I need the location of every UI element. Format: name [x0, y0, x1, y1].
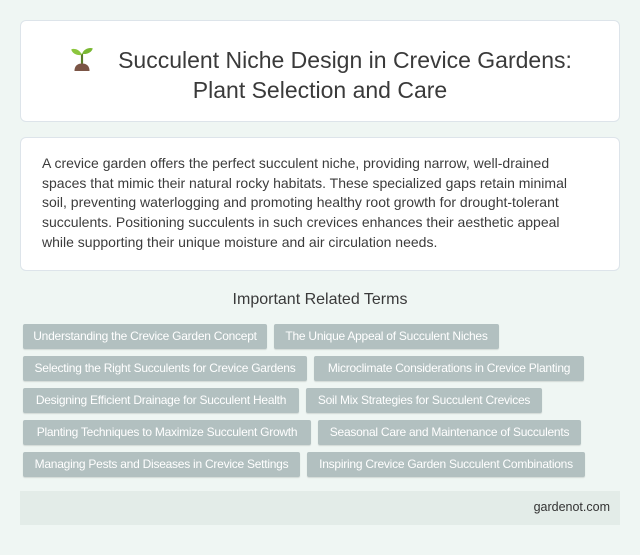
tag 6: Soil Mix Strategies for Succulent Crevices [318, 393, 530, 407]
section heading: Important Related Terms [233, 291, 407, 308]
tag 10 [307, 452, 585, 477]
tag 6 [306, 388, 542, 413]
tag 9: Managing Pests and Diseases in Crevice Settings [35, 457, 288, 471]
tag 5 [23, 388, 299, 413]
tag 5: Designing Efficient Drainage for Succulent Health [36, 393, 286, 407]
tag 1: Understanding the Crevice Garden Concept [33, 329, 257, 343]
tag 8 [318, 420, 581, 445]
tag 3 [23, 356, 307, 381]
title: Succulent Niche Design in Crevice Gardens: Plant Selection and Care [118, 47, 572, 103]
tag 10: Inspiring Crevice Garden Succulent Combinations [319, 457, 573, 471]
tag 7: Planting Techniques to Maximize Succulent Growth [37, 425, 297, 439]
tag 7 [23, 420, 311, 445]
footer [20, 491, 620, 525]
tag 1 [23, 324, 267, 349]
tag 9 [23, 452, 300, 477]
header card [20, 20, 620, 122]
tag 2 [274, 324, 499, 349]
tag 2: The Unique Appeal of Succulent Niches [285, 329, 488, 343]
description card [20, 137, 620, 271]
tag 4 [314, 356, 584, 381]
footer source: gardenot.com [534, 500, 610, 514]
tag 4: Microclimate Considerations in Crevice Planting [328, 361, 570, 375]
tag 8: Seasonal Care and Maintenance of Succulents [330, 425, 569, 439]
tag 3: Selecting the Right Succulents for Crevice Gardens [35, 361, 295, 375]
description text: A crevice garden offers the perfect succulent niche, providing narrow, well-drained spaces that mimic their natural rocky habitats. These specialized gaps retain minimal soil, preventing waterlogging and promoting healthy root growth for drought-tolerant succulents. Positioning succulents in such crevices enhances their aesthetic appeal while supporting their unique moisture and air circulation needs. [42, 155, 567, 250]
